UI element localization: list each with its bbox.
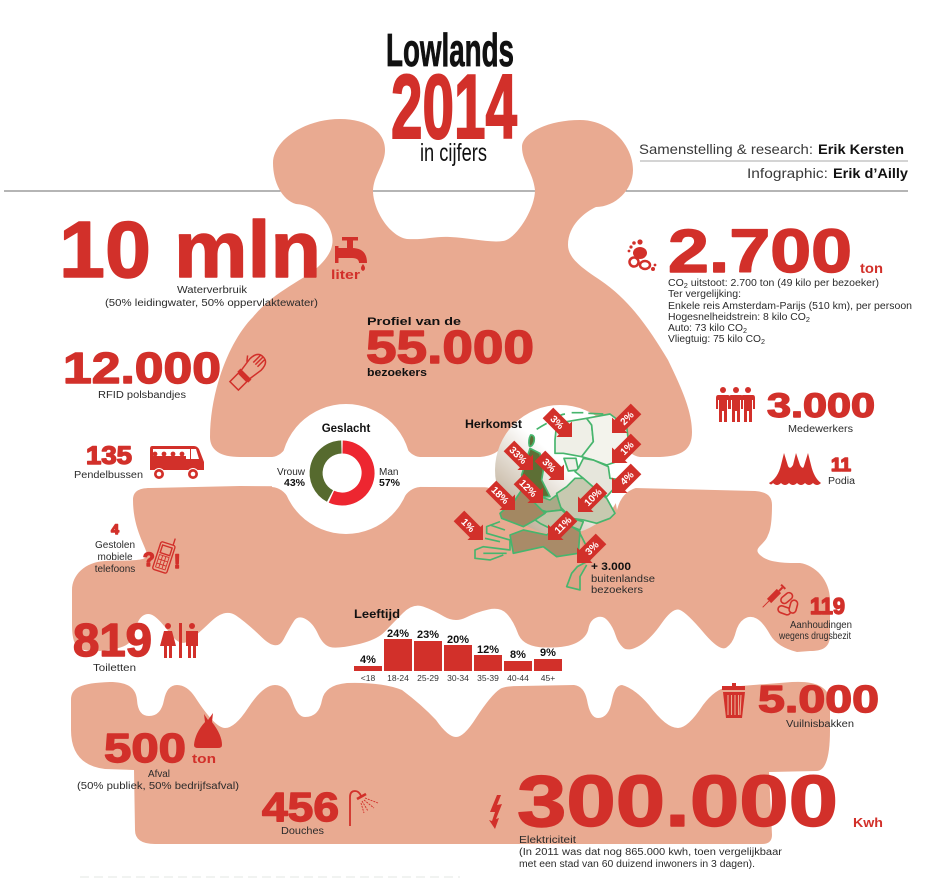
stat: wristbands: 12.000 — [63, 344, 221, 393]
tags — [451, 401, 644, 571]
age bar chart: <18 — [361, 673, 375, 683]
age bar chart: 24% — [387, 628, 409, 640]
icon: phone with marks: ? — [143, 550, 155, 571]
stat: waste: ton — [192, 751, 216, 766]
credits: Erik Kersten — [818, 142, 904, 157]
icon: syringe and pills — [761, 584, 798, 616]
title: in cijfers — [420, 139, 487, 167]
stat: CO2: 2 — [743, 328, 747, 335]
stat: CO2: Ter vergelijking: — [668, 289, 741, 300]
stat: staff: 3.000 — [767, 387, 875, 425]
stat: electricity — [517, 762, 883, 870]
icon: toilet figures — [160, 623, 198, 658]
stat: stolen phones — [95, 521, 135, 575]
tags: 1% — [619, 440, 637, 458]
stat: CO2: 2 — [761, 339, 765, 346]
age bar chart: 30-34 — [447, 673, 469, 683]
stat: stolen phones: Gestolen — [95, 540, 135, 551]
stat: CO2: Enkele reis Amsterdam-Parijs (510 km), per persoon — [668, 301, 912, 312]
stat: electricity: (In 2011 was dat nog 865.000 kwh, toen vergelijkbaar — [519, 847, 783, 858]
stat: stages: 11 — [831, 455, 851, 475]
gender chart — [277, 423, 401, 499]
stat: CO2: CO — [668, 278, 683, 289]
icon: shower — [350, 791, 378, 826]
age bar chart — [354, 607, 562, 683]
white cut-out for gender — [272, 404, 420, 534]
stat: bins — [758, 679, 879, 730]
stat: CO2: 2.700 — [668, 217, 852, 285]
gender chart: 57% — [379, 477, 401, 489]
tags: 12% — [516, 478, 538, 500]
stat: electricity: Elektriciteit — [519, 835, 576, 846]
credits: Samenstelling & research: — [639, 141, 813, 157]
stat: waste — [77, 725, 239, 792]
tags: 33% — [506, 445, 528, 467]
stat: staff — [767, 387, 875, 435]
gender chart: Vrouw — [277, 467, 306, 478]
origin map — [451, 401, 655, 596]
stat: drug arrests: Aanhoudingen — [790, 620, 852, 631]
stat: staff: Medewerkers — [788, 424, 853, 435]
tags: 1% — [458, 517, 477, 535]
gender chart: Geslacht — [322, 423, 370, 435]
stat: wristbands: RFID polsbandjes — [98, 390, 186, 401]
age bar chart: 4% — [360, 654, 376, 666]
title: Lowlands — [386, 24, 514, 76]
stat: water use: 10 mln — [59, 205, 321, 294]
stat: water use: (50% leidingwater, 50% oppervlaktewater) — [105, 298, 318, 309]
stat: stages — [828, 455, 855, 487]
stat: visitors: Profiel van de — [367, 316, 461, 328]
stat: showers: Douches — [281, 826, 324, 837]
credits: Erik d’Ailly — [833, 166, 909, 181]
icon: footprints — [628, 239, 656, 271]
tags: 10% — [583, 487, 605, 509]
age bar chart: 9% — [540, 647, 556, 659]
stat: shuttle buses: 135 — [86, 442, 132, 470]
age bar chart: 40-44 — [507, 673, 529, 683]
age bar chart: Leeftijd — [354, 607, 400, 621]
icon: phone with marks — [143, 535, 180, 574]
panel: bottom blob — [71, 682, 830, 844]
gender chart: 43% — [284, 477, 306, 489]
stat: toilets: Toiletten — [93, 663, 136, 674]
stat: CO2: ton — [860, 260, 883, 276]
panel: middle blob with drips — [72, 486, 830, 652]
age bar chart: 20% — [447, 634, 469, 646]
stat: bins: 5.000 — [758, 679, 879, 721]
icon: wristband hand — [226, 348, 269, 392]
stat: drug arrests: 119 — [810, 593, 845, 619]
stat: stages: Podia — [828, 476, 855, 487]
icon: tap — [335, 237, 367, 271]
tags: 11% — [553, 515, 574, 537]
age bar chart: 12% — [477, 644, 499, 656]
stat: water use: liter — [331, 267, 360, 282]
origin map: Herkomst — [465, 419, 522, 431]
stat: waste: 500 — [104, 725, 186, 771]
stat: CO2: Auto: 73 kilo CO — [668, 323, 741, 334]
map of provinces — [475, 413, 628, 590]
stat: shuttle buses — [74, 442, 143, 481]
stat: electricity: 300.000 — [517, 762, 838, 842]
icon: bus — [150, 446, 204, 480]
tags: 3% — [547, 414, 566, 432]
title — [386, 24, 517, 167]
stat: CO2: Hogesnelheidstrein: 8 kilo CO — [668, 312, 800, 323]
icon: lightning bolt — [489, 795, 502, 829]
icon: staff figures — [716, 387, 755, 422]
stat: toilets: 819 — [73, 614, 152, 666]
stat: stolen phones: 4 — [111, 521, 119, 537]
stat: drug arrests: wegens drugsbezit — [778, 631, 851, 642]
title: 2014 — [391, 57, 517, 158]
stat: shuttle buses: Pendelbussen — [74, 470, 143, 481]
stat: CO2: 2 — [806, 317, 810, 324]
tags: 18% — [488, 485, 510, 507]
white cut-out for origin map — [480, 405, 640, 535]
stat: electricity: met een stad van 60 duizend inwoners in 3 dagen). — [519, 859, 755, 870]
stat: CO2 — [668, 217, 912, 346]
tags: 3% — [539, 457, 558, 475]
tags: 2% — [619, 410, 637, 428]
stat: visitors: 55.000 — [366, 321, 534, 373]
panel: top dome blob — [210, 119, 692, 457]
age bar chart: 8% — [510, 649, 526, 661]
icon: phone with marks: ! — [174, 552, 180, 573]
gender chart: Man — [379, 467, 398, 478]
icon: waste bag — [194, 713, 222, 748]
icon: bin — [722, 683, 745, 718]
icon: festival tent — [769, 453, 821, 485]
age bar chart: 25-29 — [417, 673, 439, 683]
stat: waste: (50% publiek, 50% bedrijfsafval) — [77, 781, 239, 792]
age bar chart: 18-24 — [387, 673, 409, 683]
age bar chart: 45+ — [541, 673, 555, 683]
origin map: + 3.000 — [591, 561, 631, 573]
stat: visitors — [366, 316, 534, 379]
stat: bins: Vuilnisbakken — [786, 719, 854, 730]
donut segment: vrouw — [316, 447, 341, 496]
age bar chart: 35-39 — [477, 673, 499, 683]
credits — [639, 141, 909, 181]
stat: CO2: uitstoot: 2.700 ton (49 kilo per bezoeker) — [688, 278, 879, 289]
stat: water use: Waterverbruik — [177, 285, 248, 296]
tags: 3% — [584, 540, 602, 558]
stat: electricity: Kwh — [853, 815, 883, 830]
origin map: buitenlandse — [591, 574, 655, 585]
tags: 4% — [619, 470, 637, 488]
stat: visitors: bezoekers — [367, 367, 427, 379]
stat: waste: Afval — [148, 769, 170, 780]
stat: CO2: Vliegtuig: 75 kilo CO — [668, 334, 759, 345]
credits: Infographic: — [747, 165, 828, 181]
stat: showers: 456 — [262, 784, 339, 830]
stat: CO2: 2 — [684, 283, 688, 290]
stat: stolen phones: telefoons — [95, 564, 135, 575]
donut segment: man — [331, 447, 368, 499]
age bar chart: 23% — [417, 629, 439, 641]
origin map: bezoekers — [591, 585, 643, 596]
stat: stolen phones: mobiele — [97, 552, 133, 563]
stat: drug arrests — [778, 593, 852, 642]
